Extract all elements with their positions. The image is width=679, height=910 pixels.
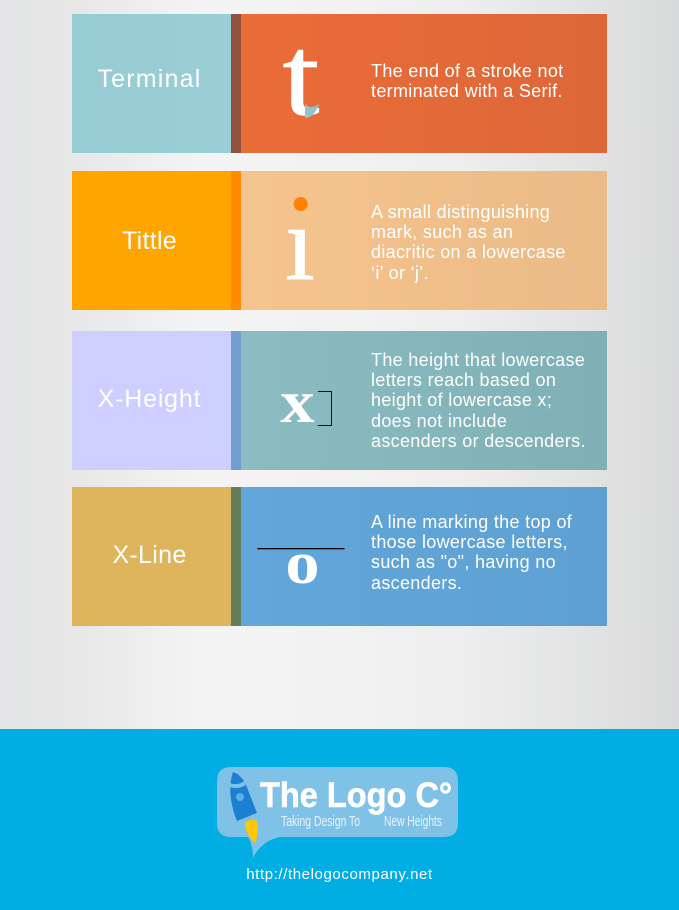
heading: x-height: X-Height	[98, 385, 201, 413]
text: tittle definition: mark, such as an	[371, 222, 513, 242]
text: x-line definition: those lowercase letters,	[371, 532, 568, 552]
text: x-height definition	[371, 350, 586, 451]
footer band	[0, 729, 679, 910]
logo tagline right: New Heights	[384, 814, 442, 830]
text: tittle definition	[371, 202, 566, 283]
text: x-line definition: A line marking the top of	[371, 512, 572, 532]
logo tagline left: Taking Design To	[281, 814, 360, 830]
text: x-height definition: does not include	[371, 411, 507, 431]
text: x-height definition: The height that lowercase	[371, 350, 585, 370]
text: tittle definition: diacritic on a lowercase	[371, 242, 566, 262]
logo wordmark: The Logo C°	[260, 776, 452, 815]
icon: letter x with height bracket	[280, 369, 332, 435]
heading: tittle: Tittle	[122, 227, 177, 255]
logo	[217, 767, 458, 858]
text: tittle definition: ‘i’ or ‘j’.	[371, 263, 429, 283]
panel: x-line	[72, 487, 607, 626]
icon: letter t: t	[283, 14, 319, 139]
text: terminal definition	[371, 61, 563, 101]
text: tittle definition: A small distinguishing	[371, 202, 550, 222]
text: x-height definition: ascenders or descenders.	[371, 431, 586, 451]
text: terminal definition: The end of a stroke not	[371, 61, 563, 81]
icon: letter i with dot: ı	[285, 185, 315, 302]
panel: x-height	[72, 331, 607, 470]
text: x-line definition: ascenders.	[371, 573, 462, 593]
text: x-height definition: letters reach based on	[371, 370, 556, 390]
icon: rocket	[230, 772, 258, 843]
heading: terminal: Terminal	[97, 65, 202, 93]
panel: terminal	[72, 14, 607, 153]
text: terminal definition: terminated with a Serif.	[371, 81, 563, 101]
text: x-height definition: height of lowercase x;	[371, 390, 552, 410]
text: x-line definition: such as "o", having no	[371, 552, 556, 572]
icon: letter o under x-line: o	[285, 530, 320, 596]
url: http://thelogocompany.net	[246, 866, 433, 883]
icon: letter x with height bracket: x	[280, 369, 315, 435]
text: x-line definition	[371, 512, 572, 593]
icon: letter o under x-line	[258, 530, 344, 596]
panel: tittle	[72, 171, 607, 310]
heading: x-line: X-Line	[112, 541, 187, 569]
logo speech bubble	[217, 767, 458, 858]
